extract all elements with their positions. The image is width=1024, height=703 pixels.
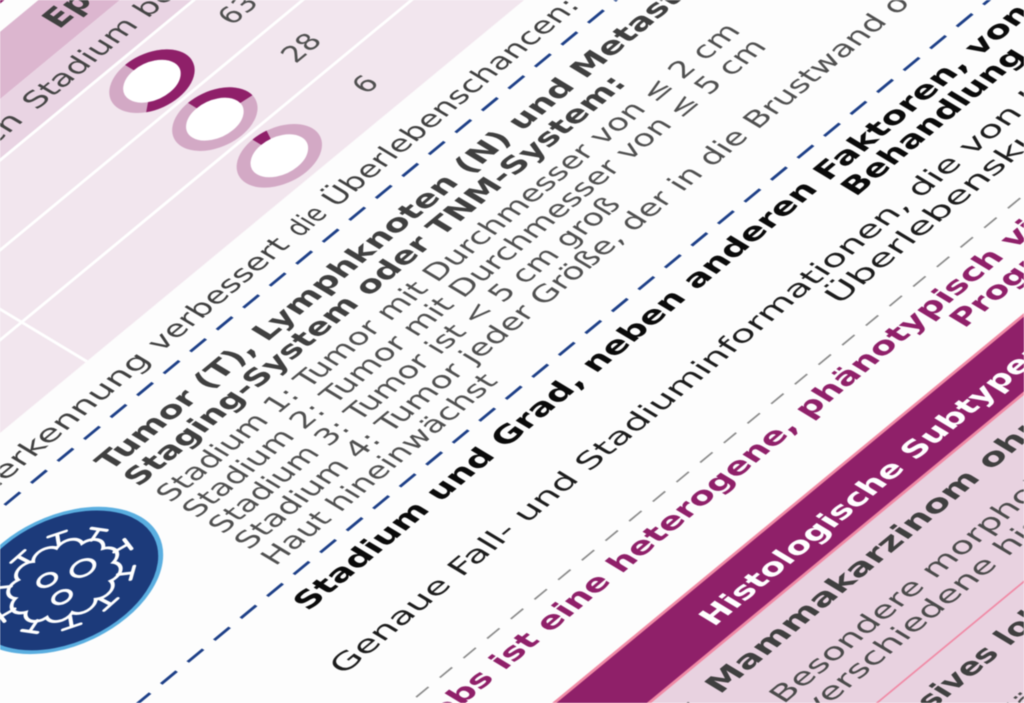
text: early detection: verbessert [139, 232, 297, 356]
donut: 6 [229, 119, 330, 192]
text: early detection: Überlebenschancen: [313, 0, 587, 211]
block: stage and grade statement: Stadium und Grad, neben anderen Faktoren, von [285, 0, 1024, 615]
subtype: invasive ductal [534, 352, 1024, 703]
value: 28: 28 [273, 28, 329, 68]
TNM heading: Staging-System oder TNM-System: [115, 70, 633, 491]
subtype: invasive ductal: Mammakarzinom ohne [697, 394, 1024, 698]
block: case information: Genaue Fall- und Stadiuminformationen, die von Klinikern [322, 0, 1024, 679]
text: early detection [0, 0, 587, 535]
donut: 28 [165, 83, 265, 156]
stage list: Stadium 4: Tumor jeder Größe, der in die Brustwand oder [226, 0, 958, 554]
band heading: Histologische Subtypen [691, 335, 1024, 631]
value: 6: 6 [344, 70, 386, 98]
donut: 63 [102, 45, 202, 118]
block: stage and grade statement: Behandlung [833, 42, 1024, 201]
stage list: Stadium 2: Tumor mit Durchmesser von ≤ 5 cm [174, 34, 774, 523]
TNM heading: Tumor (T), Lymphknoten (N) und Metastasen [87, 0, 757, 475]
table column label [0, 0, 315, 235]
block: TNM staging [87, 0, 985, 573]
stage list: Haut hineinwächst [253, 368, 505, 570]
table header bar [0, 0, 944, 593]
text: early detection: die [278, 201, 335, 241]
top magenta strip [0, 0, 877, 553]
stage list: Stadium 3: Tumor ist < 5 cm groß [200, 191, 628, 538]
icon: cancer cell [0, 482, 200, 679]
stage list: Stadium 1: Tumor mit Durchmesser von ≤ 2 cm [148, 18, 748, 507]
